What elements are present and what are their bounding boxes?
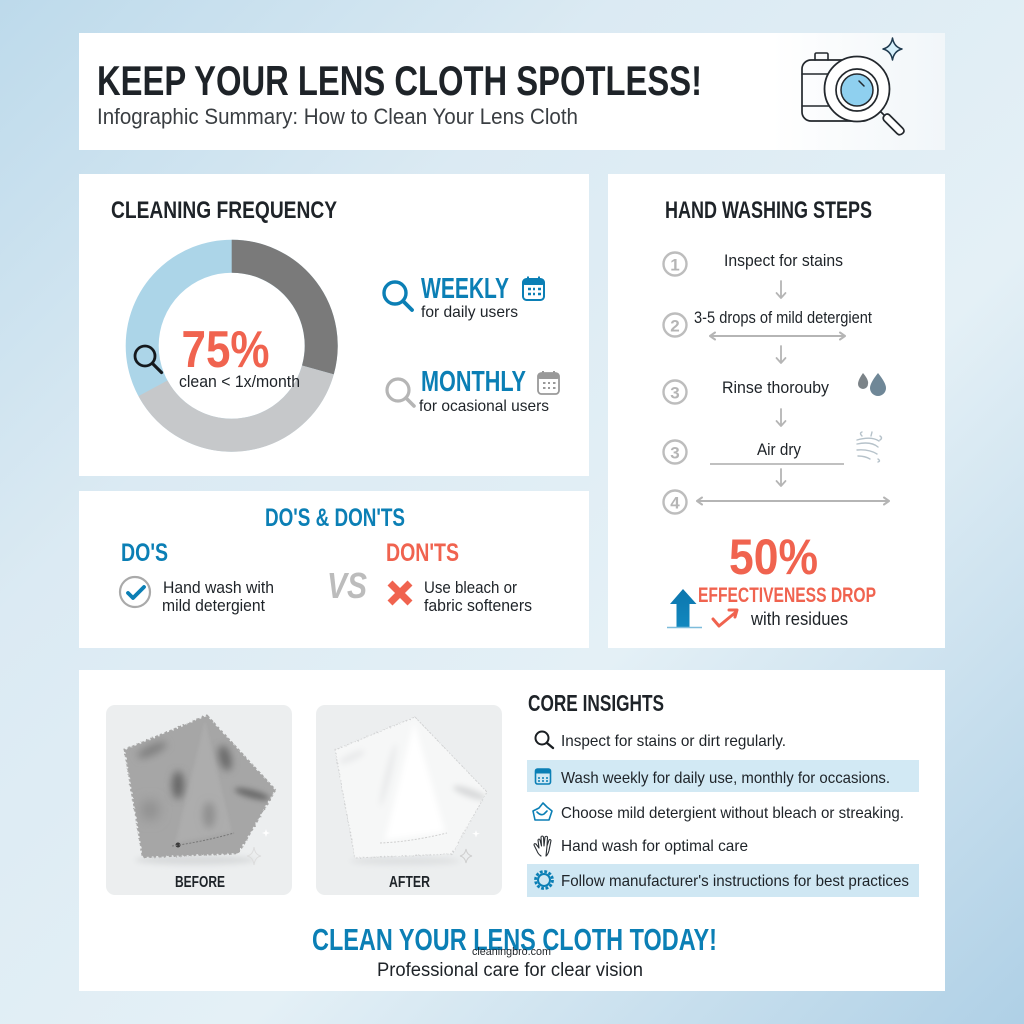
step 3: rinse — [664, 373, 886, 426]
weekly item: WEEKLY — [421, 273, 509, 305]
label: after: AFTER — [389, 874, 430, 891]
icon: camera with magnifier — [802, 38, 904, 135]
before photo — [106, 705, 292, 895]
step 2: 2 — [670, 316, 680, 336]
step 2: 3-5 drops of mild detergient — [694, 309, 872, 327]
step 1 — [664, 252, 843, 298]
icon: water drops — [858, 373, 886, 396]
insight: follow instructions: Follow manufacturer's instructions for best practices — [561, 873, 909, 890]
step 3: air dry: Air dry — [757, 441, 802, 459]
icon: red trend arrow — [713, 610, 737, 626]
icon: air flow — [857, 432, 882, 462]
do's column: Hand wash with — [163, 579, 274, 597]
step 1: Inspect for stains — [724, 252, 843, 270]
insight: wash schedule: Wash weekly for daily use, monthly for occasions. — [561, 770, 890, 787]
monthly item: MONTHLY — [421, 366, 526, 398]
panel: hand washing steps — [608, 174, 945, 648]
donut caption: clean < 1x/month — [179, 373, 300, 391]
stat: effectiveness drop: 50% — [729, 529, 818, 585]
weekly item: for daily users — [421, 304, 518, 321]
step 3: rinse: Rinse thorouby — [722, 379, 830, 397]
heading: core insights: CORE INSIGHTS — [528, 690, 664, 716]
don'ts column — [386, 539, 532, 615]
heading: do's and don'ts: DO'S & DON'TS — [265, 504, 405, 532]
heading: cleaning frequency: CLEANING FREQUENCY — [111, 197, 337, 224]
call to action — [312, 922, 717, 981]
icon: cross — [390, 583, 410, 603]
label: before: BEFORE — [175, 874, 225, 891]
monthly item: for ocasional users — [419, 398, 549, 415]
insight: follow instructions — [527, 864, 919, 897]
call to action: Professional care for clear vision — [377, 960, 643, 981]
do's column: DO'S — [121, 539, 168, 567]
insight: wash schedule — [527, 760, 919, 792]
step 3: air dry — [664, 432, 882, 486]
do's column: mild detergient — [162, 597, 265, 615]
insight: detergent: Choose mild detergient without bleach or streaking. — [561, 805, 904, 822]
do's column — [120, 539, 274, 615]
panel: bottom — [79, 670, 945, 991]
don'ts column: DON'TS — [386, 539, 459, 567]
insight: inspect: Inspect for stains or dirt regularly. — [561, 733, 786, 750]
panel: cleaning frequency — [79, 174, 589, 476]
icon: gray magnifier — [387, 379, 414, 406]
weekly item — [384, 273, 544, 321]
watermark: cleaningbro.com — [472, 946, 551, 958]
after photo — [316, 705, 502, 895]
monthly item — [387, 366, 559, 415]
don'ts column: Use bleach or — [424, 579, 517, 597]
step 4 — [664, 490, 889, 514]
heading: hand washing steps: HAND WASHING STEPS — [665, 197, 872, 224]
stat: effectiveness drop: with residues — [750, 609, 848, 629]
icon: blue magnifier — [384, 282, 412, 310]
icon: blue up arrow — [667, 589, 702, 628]
donut value: 75% — [182, 321, 270, 379]
don'ts column: fabric softeners — [424, 597, 532, 615]
vs label: VS — [327, 565, 367, 606]
step 3: air dry: 3 — [670, 444, 680, 462]
stat: effectiveness drop: EFFECTIVENESS DROP — [698, 584, 876, 607]
icon: check — [120, 577, 150, 607]
panel: header — [79, 33, 945, 150]
icon: magnifier on donut — [135, 346, 162, 372]
icon: blue calendar — [523, 276, 544, 300]
step 1: 1 — [670, 256, 680, 274]
call to action: CLEAN YOUR LENS CLOTH TODAY! — [312, 922, 717, 957]
step 2 — [664, 309, 872, 363]
step 3: rinse: 3 — [670, 384, 680, 402]
stat: effectiveness drop — [667, 529, 876, 629]
panel: do's and don'ts — [79, 491, 589, 648]
core insights — [527, 690, 919, 897]
insight: hand wash: Hand wash for optimal care — [561, 838, 748, 855]
donut chart — [135, 256, 321, 435]
step 4: 4 — [670, 494, 680, 512]
subtitle: Infographic Summary: How to Clean Your Lens Cloth — [97, 104, 578, 129]
title: KEEP YOUR LENS CLOTH SPOTLESS! — [97, 57, 702, 104]
icon: gray calendar — [538, 371, 559, 394]
